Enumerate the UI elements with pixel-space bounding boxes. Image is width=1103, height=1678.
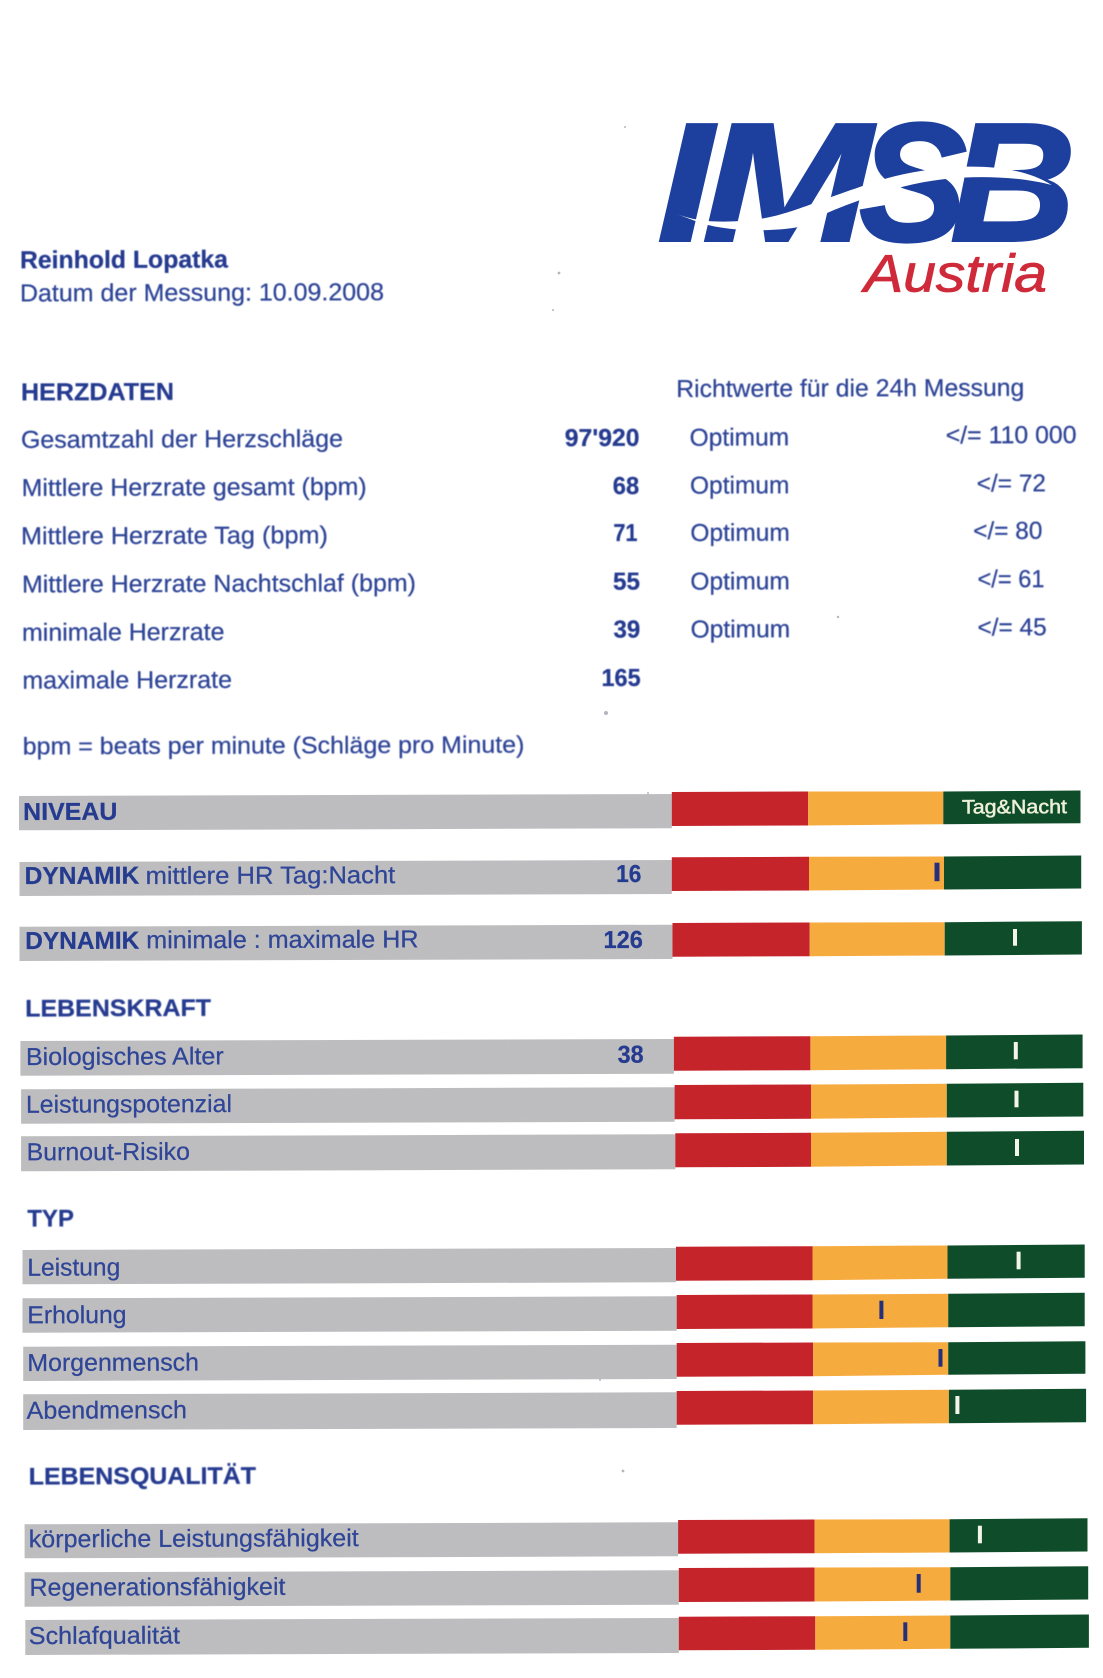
heading Richtwerte: Richtwerte für die 24h Messung: [676, 375, 1024, 403]
person header: [20, 246, 384, 307]
bar: Leistung: [22, 1244, 1085, 1284]
marker: [938, 1349, 942, 1367]
sublabel: mittlere HR Tag:Nacht: [146, 862, 395, 890]
value: 55: [613, 569, 640, 596]
optimum label: Optimum: [691, 616, 790, 644]
threshold: </= 72: [977, 470, 1046, 498]
label: Morgenmensch: [27, 1349, 199, 1377]
sublabel: minimale : maximale HR: [146, 926, 418, 954]
marker: [903, 1622, 907, 1641]
bar: Abendmensch: [23, 1389, 1086, 1430]
bar: Dynamik Tag Nacht: [20, 856, 1081, 896]
label: Leistungspotenzial: [26, 1091, 232, 1119]
bar: koerperliche Leistungsfaehigkeit: [25, 1518, 1088, 1558]
optimum label: Optimum: [690, 424, 789, 452]
marker: [978, 1526, 982, 1543]
logo wordmark letter I: I: [657, 88, 717, 277]
panel: Richtwerte: [676, 375, 1077, 644]
marker: [1015, 1139, 1019, 1156]
value: 71: [613, 520, 637, 547]
label Niveau: NIVEAU: [23, 799, 117, 826]
row label: minimale Herzrate: [22, 619, 224, 647]
threshold: </= 110 000: [946, 422, 1077, 449]
bar: Leistungspotenzial: [21, 1083, 1083, 1124]
heading Lebensqualitaet: LEBENSQUALITÄT: [29, 1463, 256, 1490]
logo subtitle Austria: Austria: [861, 245, 1047, 304]
logo wordmark letter B: B: [950, 88, 1076, 277]
marker: [1017, 1252, 1021, 1269]
label: körperliche Leistungsfähigkeit: [29, 1525, 359, 1553]
marker: [879, 1301, 883, 1319]
value: 16: [616, 861, 641, 888]
label: DYNAMIK: [25, 863, 140, 890]
panel: Herzdaten: [21, 379, 641, 760]
marker: [917, 1574, 921, 1593]
marker: [934, 863, 940, 881]
bar: Niveau: [19, 790, 1080, 830]
value: 126: [603, 927, 643, 954]
bar: Erholung: [22, 1293, 1085, 1333]
threshold: </= 45: [977, 614, 1047, 642]
marker: [1013, 929, 1017, 946]
label: Regenerationsfähigkeit: [29, 1574, 286, 1602]
logo swoosh: [675, 167, 1052, 230]
marker: [1014, 1042, 1018, 1059]
label: Abendmensch: [27, 1397, 187, 1425]
value: 165: [601, 665, 641, 692]
optimum label: Optimum: [690, 472, 789, 500]
label: Schlafqualität: [29, 1622, 180, 1650]
logo wordmark letter M: M: [702, 88, 876, 277]
heading Typ: TYP: [27, 1206, 74, 1233]
bar: Biologisches Alter: [20, 1034, 1083, 1076]
marker: [1014, 1091, 1018, 1107]
threshold: </= 61: [977, 566, 1044, 593]
threshold: </= 80: [973, 518, 1042, 545]
label: DYNAMIK: [25, 928, 140, 955]
bar: Morgenmensch: [23, 1341, 1085, 1381]
label: Burnout-Risiko: [27, 1139, 190, 1166]
optimum label: Optimum: [690, 568, 790, 596]
bar: Dynamik min max: [20, 921, 1082, 961]
logo wordmark letter S: S: [859, 88, 967, 277]
heading Lebenskraft: LEBENSKRAFT: [25, 995, 211, 1023]
value: 68: [613, 473, 639, 500]
bar: Burnout-Risiko: [21, 1131, 1084, 1171]
measurement date: Datum der Messung: 10.09.2008: [20, 279, 384, 307]
row label: maximale Herzrate: [22, 667, 232, 695]
logo: IMSB Austria: [657, 88, 1076, 304]
row label: Mittlere Herzrate Nachtschlaf (bpm): [22, 570, 416, 598]
value: 97'920: [565, 425, 640, 452]
value: 38: [618, 1042, 644, 1069]
bar: Regenerationsfaehigkeit: [25, 1566, 1088, 1607]
heading Herzdaten: HERZDATEN: [21, 379, 174, 406]
value: 39: [613, 616, 640, 644]
name: Reinhold Lopatka: [20, 246, 228, 274]
label: Leistung: [27, 1254, 120, 1282]
row label: Gesamtzahl der Herzschläge: [21, 426, 343, 454]
optimum label: Optimum: [690, 520, 790, 547]
row label: Mittlere Herzrate Tag (bpm): [21, 522, 328, 550]
bar: Schlafqualitaet: [25, 1614, 1089, 1655]
label: Biologisches Alter: [26, 1043, 224, 1071]
label: Erholung: [27, 1302, 127, 1329]
marker: [955, 1396, 959, 1414]
row label: Mittlere Herzrate gesamt (bpm): [22, 474, 367, 502]
footnote bpm: bpm = beats per minute (Schläge pro Minute): [23, 732, 524, 760]
label Tag und Nacht: Tag&Nacht: [962, 796, 1068, 818]
